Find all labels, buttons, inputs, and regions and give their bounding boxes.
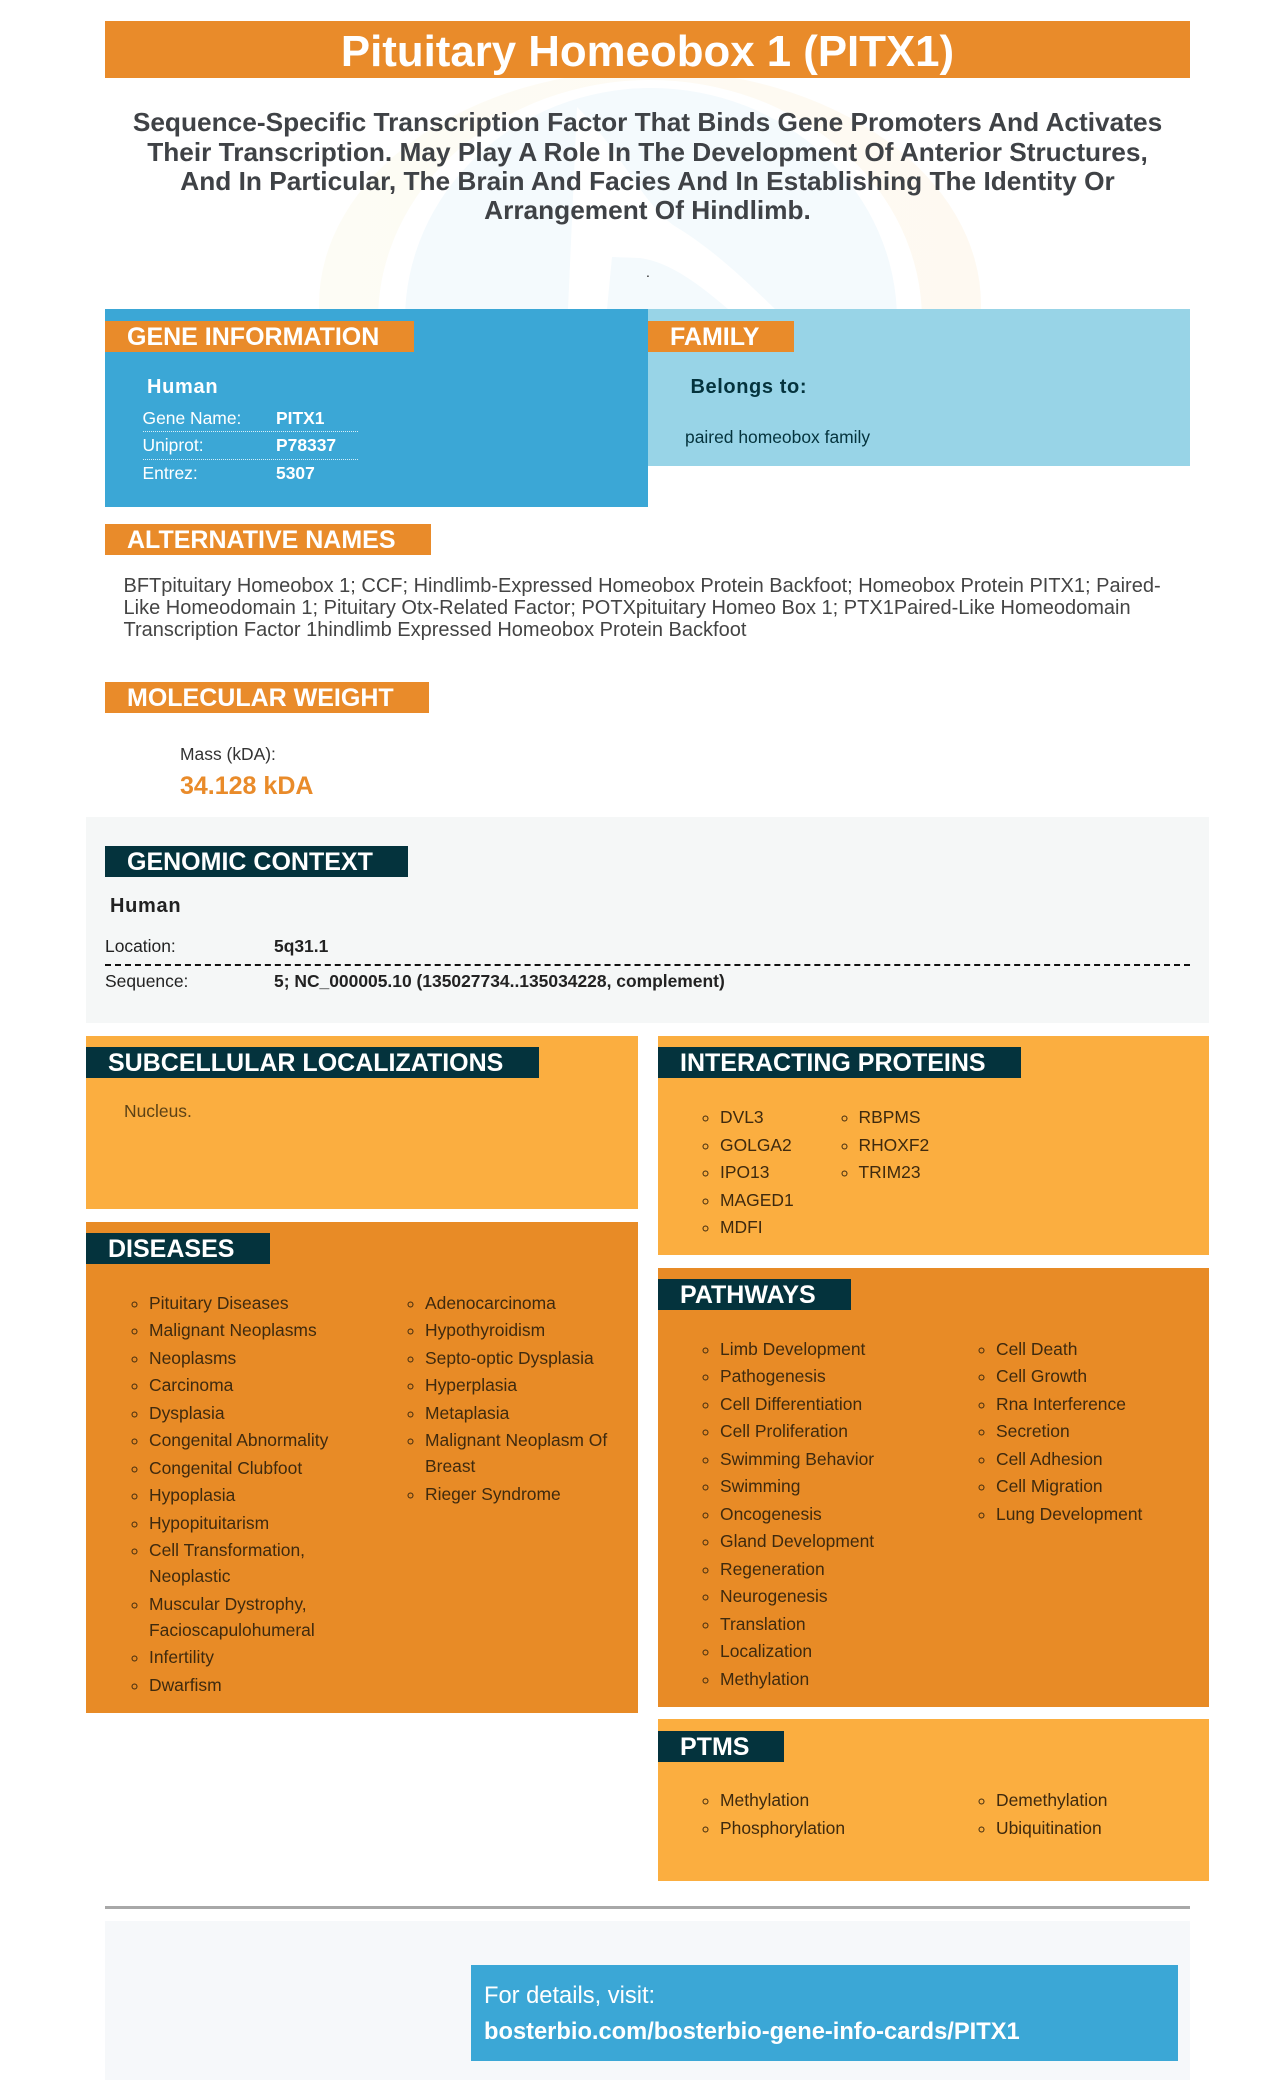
list: ptms column 1: Methylation [720, 1790, 809, 1810]
list: pathways column 2: Cell Death [996, 1338, 1077, 1358]
species label: Human [110, 895, 181, 917]
title [105, 21, 1190, 78]
details url: bosterbio.com/bosterbio-gene-info-cards/PITX1 [484, 2019, 1020, 2045]
row: entrez [142, 463, 315, 483]
row: uniprot: P78337 [276, 435, 336, 455]
list: diseases column 1: Congenital Abnormality [149, 1430, 328, 1450]
list: ptms column 1: Phosphorylation [720, 1818, 845, 1838]
heading: alternative names: ALTERNATIVE NAMES [127, 526, 396, 554]
list: pathways column 1: Gland Development [720, 1531, 874, 1551]
panel: pathways [658, 1268, 1209, 1707]
row: gene name: PITX1 [276, 408, 324, 428]
heading: ptms [658, 1731, 784, 1762]
heading: ptms: PTMS [680, 1733, 749, 1761]
list: diseases column 1: Infertility [149, 1647, 214, 1667]
heading: gene information: GENE INFORMATION [127, 323, 379, 351]
list: pathways column 1: Limb Development [720, 1338, 865, 1358]
row: gene name: Gene Name: [142, 408, 241, 428]
row: uniprot [142, 432, 358, 460]
alternative names text: BFTpituitary Homeobox 1; CCF; Hindlimb-Expressed Homeobox Protein Backfoot; Homeobox Protein PITX1; Paired- [124, 575, 1161, 597]
panel: interacting proteins [658, 1036, 1209, 1255]
list: diseases column 2 [408, 1293, 608, 1504]
list: diseases column 1: Neoplasms [149, 1348, 236, 1368]
background watermark logo [319, 78, 981, 309]
list: diseases column 2: Hypothyroidism [425, 1320, 545, 1340]
row: gene name [142, 405, 358, 432]
row: sequence: 5; NC_000005.10 (135027734..135034228, complement) [274, 970, 725, 990]
alternative names text: Transcription Factor 1hindlimb Expressed Homeobox Protein Backfoot [124, 619, 746, 641]
list: proteins column 2: TRIM23 [858, 1162, 921, 1182]
heading: molecular weight: MOLECULAR WEIGHT [127, 684, 394, 712]
heading: family: FAMILY [670, 323, 759, 351]
list: diseases column 1: Malignant Neoplasms [149, 1320, 317, 1340]
belongs to label: Belongs to: [690, 376, 807, 398]
heading: subcellular localizations: SUBCELLULAR LOCALIZATIONS [108, 1049, 503, 1077]
row: location: 5q31.1 [274, 936, 328, 956]
list: pathways column 1: Cell Proliferation [720, 1421, 848, 1441]
list: pathways column 1: Neurogenesis [720, 1586, 828, 1606]
list: pathways column 2: Rna Interference [996, 1394, 1126, 1414]
mass value: 34.128 kDA [180, 772, 313, 800]
list: pathways column 1: Oncogenesis [720, 1504, 822, 1524]
list: diseases column 2: Hyperplasia [425, 1375, 517, 1395]
list: pathways column 1: Cell Differentiation [720, 1394, 862, 1414]
list: pathways column 1: Pathogenesis [720, 1366, 826, 1386]
list: diseases column 1 [132, 1293, 328, 1695]
title: Pituitary Homeobox 1 (PITX1) [341, 27, 954, 76]
heading: interacting proteins: INTERACTING PROTEINS [680, 1049, 986, 1077]
row: entrez: 5307 [276, 463, 315, 483]
list: diseases column 1: Hypoplasia [149, 1485, 235, 1505]
row: uniprot: Uniprot: [142, 435, 204, 455]
list: ptms column 2 [978, 1790, 1107, 1838]
list: diseases column 1: Muscular Dystrophy, [149, 1594, 307, 1614]
row: location [105, 932, 1190, 966]
list: pathways column 2: Cell Adhesion [996, 1448, 1103, 1468]
list: ptms column 2: Ubiquitination [996, 1818, 1102, 1838]
list: proteins column 1: MAGED1 [720, 1190, 794, 1210]
list: proteins column 1 [702, 1107, 794, 1237]
list: proteins column 1: GOLGA2 [720, 1134, 792, 1154]
list: diseases column 1: Congenital Clubfoot [149, 1458, 302, 1478]
list: diseases column 2: Metaplasia [425, 1403, 509, 1423]
heading: diseases [86, 1233, 270, 1264]
alternative names text: Like Homeodomain 1; Pituitary Otx-Related Factor; POTXpituitary Homeo Box 1; PTX1Paired-Like Homeodomain [124, 597, 1131, 619]
list: pathways column 1: Swimming Behavior [720, 1448, 874, 1468]
list: diseases column 1: Hypopituitarism [149, 1513, 269, 1533]
dot mark: . [646, 264, 650, 280]
heading: pathways [658, 1279, 851, 1310]
list: diseases column 2: Adenocarcinoma [425, 1293, 556, 1313]
list: pathways column 2: Cell Growth [996, 1366, 1087, 1386]
panel: subcellular localizations [86, 1036, 638, 1209]
summary text: Sequence-Specific Transcription Factor That Binds Gene Promoters And Activates [133, 107, 1162, 137]
heading: diseases: DISEASES [108, 1235, 234, 1263]
list: pathways column 1: Translation [720, 1614, 806, 1634]
list: diseases column 1: Pituitary Diseases [149, 1293, 289, 1313]
list: proteins column 2 [842, 1107, 929, 1182]
list: diseases column 1: Dwarfism [149, 1675, 222, 1695]
row: entrez: Entrez: [142, 463, 198, 483]
list: ptms column 2: Demethylation [996, 1790, 1107, 1810]
row: sequence: Sequence: [105, 970, 188, 990]
list: diseases column 1: Carcinoma [149, 1375, 233, 1395]
heading: genomic context: GENOMIC CONTEXT [127, 848, 373, 876]
alternative names text [124, 575, 1161, 641]
list: pathways column 2 [978, 1338, 1142, 1524]
list: pathways column 1 [702, 1338, 874, 1688]
list: proteins column 1: IPO13 [720, 1162, 769, 1182]
list: pathways column 1: Swimming [720, 1476, 800, 1496]
list: proteins column 2: RHOXF2 [858, 1134, 929, 1154]
panel: family [648, 309, 1190, 466]
family name: paired homeobox family [685, 426, 870, 446]
list: pathways column 2: Cell Migration [996, 1476, 1103, 1496]
list: diseases column 1: Neoplastic [149, 1566, 230, 1586]
panel: gene information [105, 309, 648, 507]
details label: For details, visit: [484, 1983, 655, 2009]
list: diseases column 2: Breast [425, 1456, 475, 1476]
list: proteins column 1: DVL3 [720, 1107, 764, 1127]
heading: pathways: PATHWAYS [680, 1281, 816, 1309]
summary text [133, 107, 1162, 225]
species label: Human [147, 376, 218, 398]
summary text: Their Transcription. May Play A Role In The Development Of Anterior Structures, [147, 137, 1148, 167]
list: diseases column 2: Rieger Syndrome [425, 1484, 561, 1504]
list: diseases column 2: Malignant Neoplasm Of [425, 1430, 607, 1450]
list: ptms column 1 [702, 1790, 845, 1838]
list: diseases column 2: Septo-optic Dysplasia [425, 1348, 594, 1368]
list: pathways column 2: Lung Development [996, 1504, 1142, 1524]
list: pathways column 1: Methylation [720, 1668, 809, 1688]
list: pathways column 2: Secretion [996, 1421, 1070, 1441]
panel: footer [105, 1921, 1190, 2080]
list: diseases column 1: Cell Transformation, [149, 1540, 305, 1560]
summary text: And In Particular, The Brain And Facies And In Establishing The Identity Or [180, 166, 1115, 196]
mass label: Mass (kDA): [180, 744, 276, 764]
panel: genomic context [86, 817, 1209, 1023]
list: proteins column 1: MDFI [720, 1217, 763, 1237]
list: pathways column 1: Localization [720, 1641, 812, 1661]
list: diseases column 1: Facioscapulohumeral [149, 1620, 315, 1640]
list: proteins column 2: RBPMS [858, 1107, 921, 1127]
localization text: Nucleus. [124, 1101, 192, 1121]
summary text: Arrangement Of Hindlimb. [484, 195, 811, 225]
panel: ptms [658, 1719, 1209, 1881]
panel: diseases [86, 1222, 638, 1713]
list: diseases column 1: Dysplasia [149, 1403, 225, 1423]
callout: details link [471, 1965, 1178, 2061]
heading: family [648, 321, 794, 352]
row: location: Location: [105, 936, 176, 956]
list: pathways column 1: Regeneration [720, 1558, 825, 1578]
